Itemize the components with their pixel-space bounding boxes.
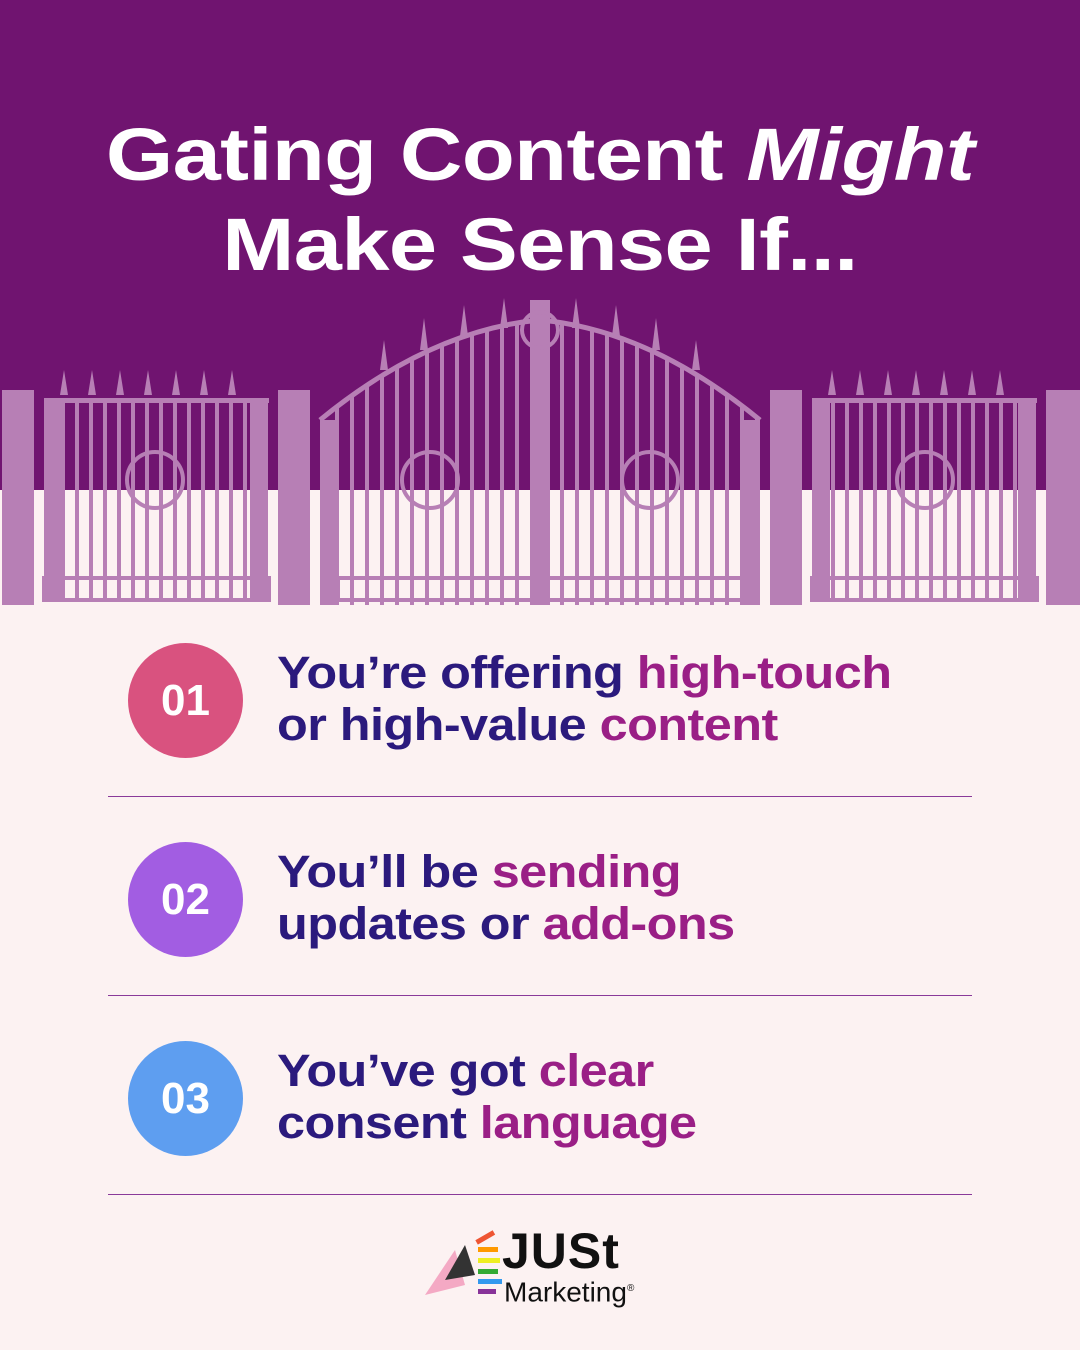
badge 01: 01 — [161, 676, 210, 725]
text 1: or high-value content — [277, 699, 778, 750]
title: Make Sense If... — [222, 203, 858, 286]
item 1 — [128, 643, 891, 758]
logo — [425, 1223, 634, 1308]
item 2 — [128, 842, 735, 957]
title: Gating Content Might — [106, 113, 974, 196]
badge 03: 03 — [161, 1074, 210, 1123]
logo icon — [425, 1230, 502, 1295]
text 3: You’ve got clear — [277, 1045, 654, 1096]
text 2: updates or add-ons — [277, 898, 735, 949]
badge 02 — [128, 842, 243, 957]
text 3: consent language — [277, 1097, 697, 1148]
text 3 — [277, 1045, 697, 1148]
badge 01 — [128, 643, 243, 758]
logo text: JUSt — [502, 1223, 620, 1279]
text 2: You’ll be sending — [277, 846, 681, 897]
badge 02: 02 — [161, 875, 210, 924]
text 1: You’re offering high-touch — [277, 647, 891, 698]
gate illustration — [2, 298, 1080, 605]
text 2 — [277, 846, 735, 949]
purple header band — [0, 0, 1080, 490]
title — [106, 113, 978, 286]
badge 03 — [128, 1041, 243, 1156]
logo: Marketing® — [504, 1276, 634, 1307]
item 3 — [128, 1041, 697, 1156]
text 1 — [277, 647, 891, 750]
